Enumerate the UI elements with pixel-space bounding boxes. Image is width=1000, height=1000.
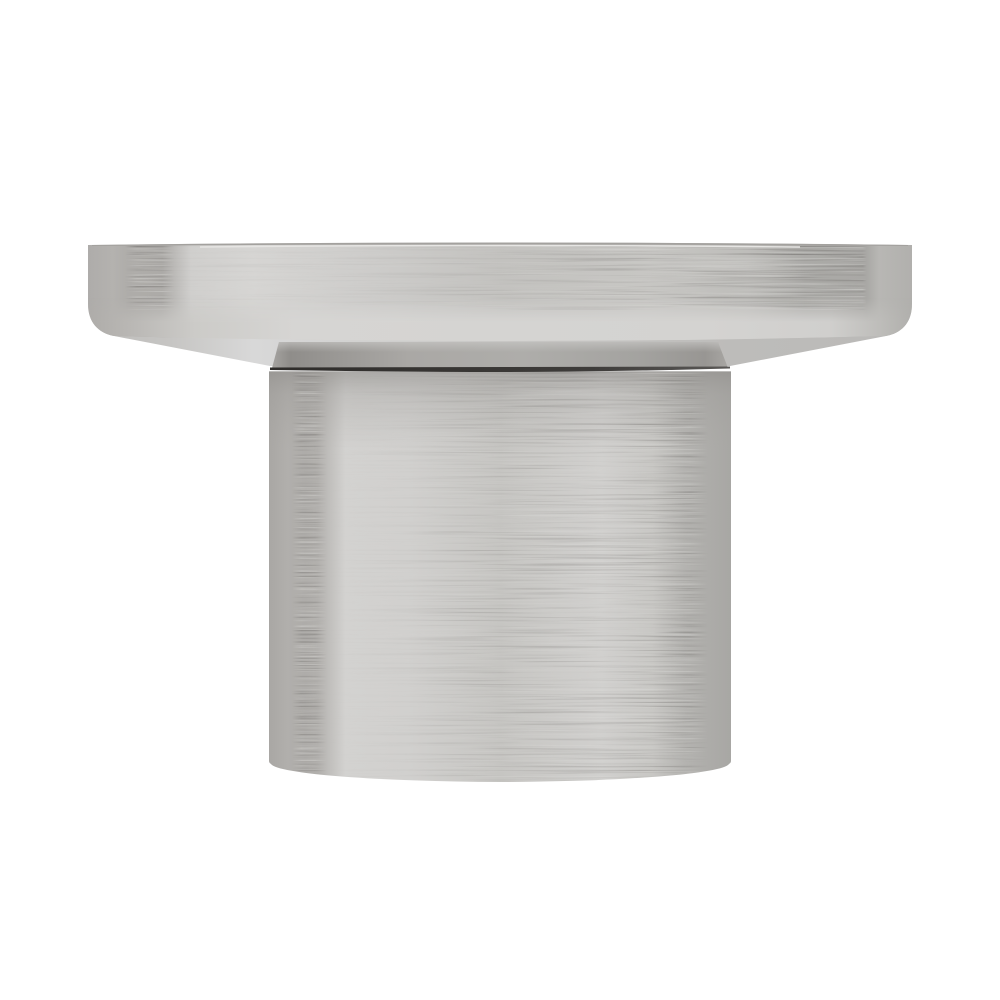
cylindrical knob stem [269, 371, 731, 784]
knob product illustration [88, 242, 912, 784]
underside chamfer of flange [114, 336, 886, 366]
recessed neck [272, 342, 728, 368]
curved lower lip of flange [88, 303, 912, 341]
top rim highlight [92, 242, 908, 246]
shadow gap between neck and stem [270, 366, 730, 372]
round flange cap [88, 242, 912, 341]
